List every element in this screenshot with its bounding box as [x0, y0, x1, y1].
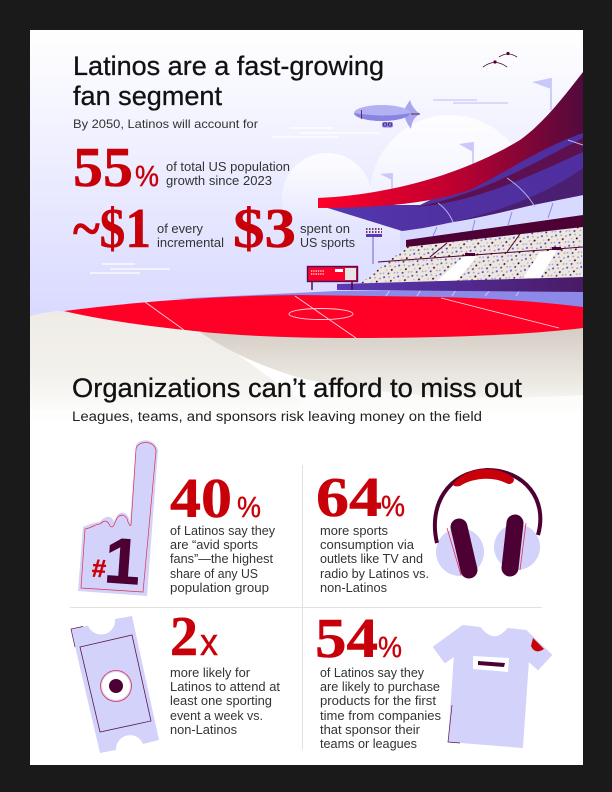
upper deck band — [406, 215, 583, 247]
stat: ~$1 of every incremental $3: ~$1 — [73, 198, 151, 260]
sand left — [30, 311, 288, 394]
title — [73, 51, 384, 111]
stands with crowd — [360, 227, 582, 284]
stat: 2x: more likely for — [170, 666, 250, 680]
stat: 2x: event a week vs. — [170, 709, 263, 723]
stat: 54%: products for the first — [320, 694, 437, 708]
railing — [378, 234, 583, 262]
stat: 64%: % — [381, 491, 405, 523]
stat: 40%: are “avid sports — [170, 538, 258, 552]
dark roof shadow — [415, 138, 583, 207]
stat: 64%: non-Latinos — [320, 581, 387, 595]
stat: 64%: 64 — [316, 467, 382, 529]
stat: 40%: population group — [170, 581, 269, 595]
stat: 2x: x — [200, 622, 218, 664]
stat: 64%: radio by Latinos vs. — [320, 567, 429, 581]
stat: 40%: fans”—the highest — [170, 552, 274, 566]
red roof — [318, 72, 583, 208]
stat: 55%: of total US population — [166, 160, 290, 174]
icon: ticket — [71, 616, 159, 753]
stat: ~$1 of every incremental $3 — [73, 198, 355, 260]
icon: foam finger — [78, 440, 158, 598]
stat: 40%: 40 — [170, 468, 232, 530]
stat: 54% — [315, 608, 441, 751]
icon: t-shirt — [434, 626, 551, 747]
stat: 55% — [73, 137, 290, 199]
stat: 40%: % — [237, 492, 261, 524]
title: Latinos are a fast-growing — [73, 51, 384, 81]
stat: 2x — [170, 606, 281, 737]
under-roof sky band — [400, 195, 583, 252]
subheading: Leagues, teams, and sponsors risk leaving money on the field — [72, 409, 482, 424]
stat: ~$1 of every incremental $3: of every — [157, 222, 204, 236]
stat: ~$1 of every incremental $3: US sports — [300, 236, 355, 250]
stand base — [337, 277, 583, 292]
stat: 54%: are likely to purchase — [320, 680, 440, 694]
darker underside band — [453, 168, 583, 222]
stat: 64%: outlets like TV and — [320, 552, 423, 566]
stat: 40%: share of any US — [170, 567, 258, 581]
purple underside of roof — [326, 133, 583, 231]
stat: ~$1 of every incremental $3: spent on — [300, 222, 350, 236]
stat: ~$1 of every incremental $3: incremental — [157, 236, 224, 250]
track — [173, 290, 583, 307]
icon: foam finger: 1 — [102, 524, 143, 598]
stat: 2x: non-Latinos — [170, 723, 237, 737]
icon: foam finger: # — [91, 554, 107, 583]
light arcs — [438, 140, 583, 222]
stat: 40% — [170, 468, 276, 595]
icon: flags — [380, 78, 551, 195]
stat: 55%: 55 — [73, 137, 133, 199]
stat: 55%: growth since 2023 — [166, 174, 272, 188]
stat: 64% — [316, 467, 429, 595]
subtitle: By 2050, Latinos will account for — [73, 117, 258, 131]
stat: 2x: Latinos to attend at — [170, 680, 281, 694]
roof columns — [433, 203, 553, 236]
field — [64, 295, 583, 338]
stat: 54%: % — [378, 632, 402, 664]
stat: 2x: 2 — [170, 606, 198, 668]
light tower — [366, 229, 382, 264]
sand under field — [200, 326, 583, 398]
heading: organizations: Organizations can’t afford to miss out — [72, 373, 522, 403]
stat: 54%: teams or leagues — [320, 737, 417, 751]
stat: 2x: least one sporting — [170, 694, 272, 708]
stat: 54%: of Latinos say they — [320, 666, 425, 680]
bottom fade — [30, 385, 583, 415]
wind lines — [90, 100, 508, 273]
sky — [30, 90, 583, 316]
icon: blimp — [354, 100, 420, 129]
scoreboard — [308, 266, 358, 290]
stat: 55%: % — [135, 161, 159, 193]
clouds — [282, 115, 512, 194]
stat: 40%: of Latinos say they — [170, 524, 276, 538]
icon: headphones — [435, 469, 540, 576]
panel: stadium illustration — [30, 52, 583, 402]
stat: 54%: that sponsor their — [320, 723, 420, 737]
stat: ~$1 of every incremental $3: $3 — [233, 198, 296, 260]
stat: 64%: consumption via — [320, 538, 414, 552]
title: fan segment — [73, 81, 222, 111]
stat: 54%: time from companies — [320, 709, 441, 723]
icon: birds — [483, 52, 517, 67]
stat: 64%: more sports — [320, 524, 388, 538]
stat: 54%: 54 — [315, 608, 378, 670]
